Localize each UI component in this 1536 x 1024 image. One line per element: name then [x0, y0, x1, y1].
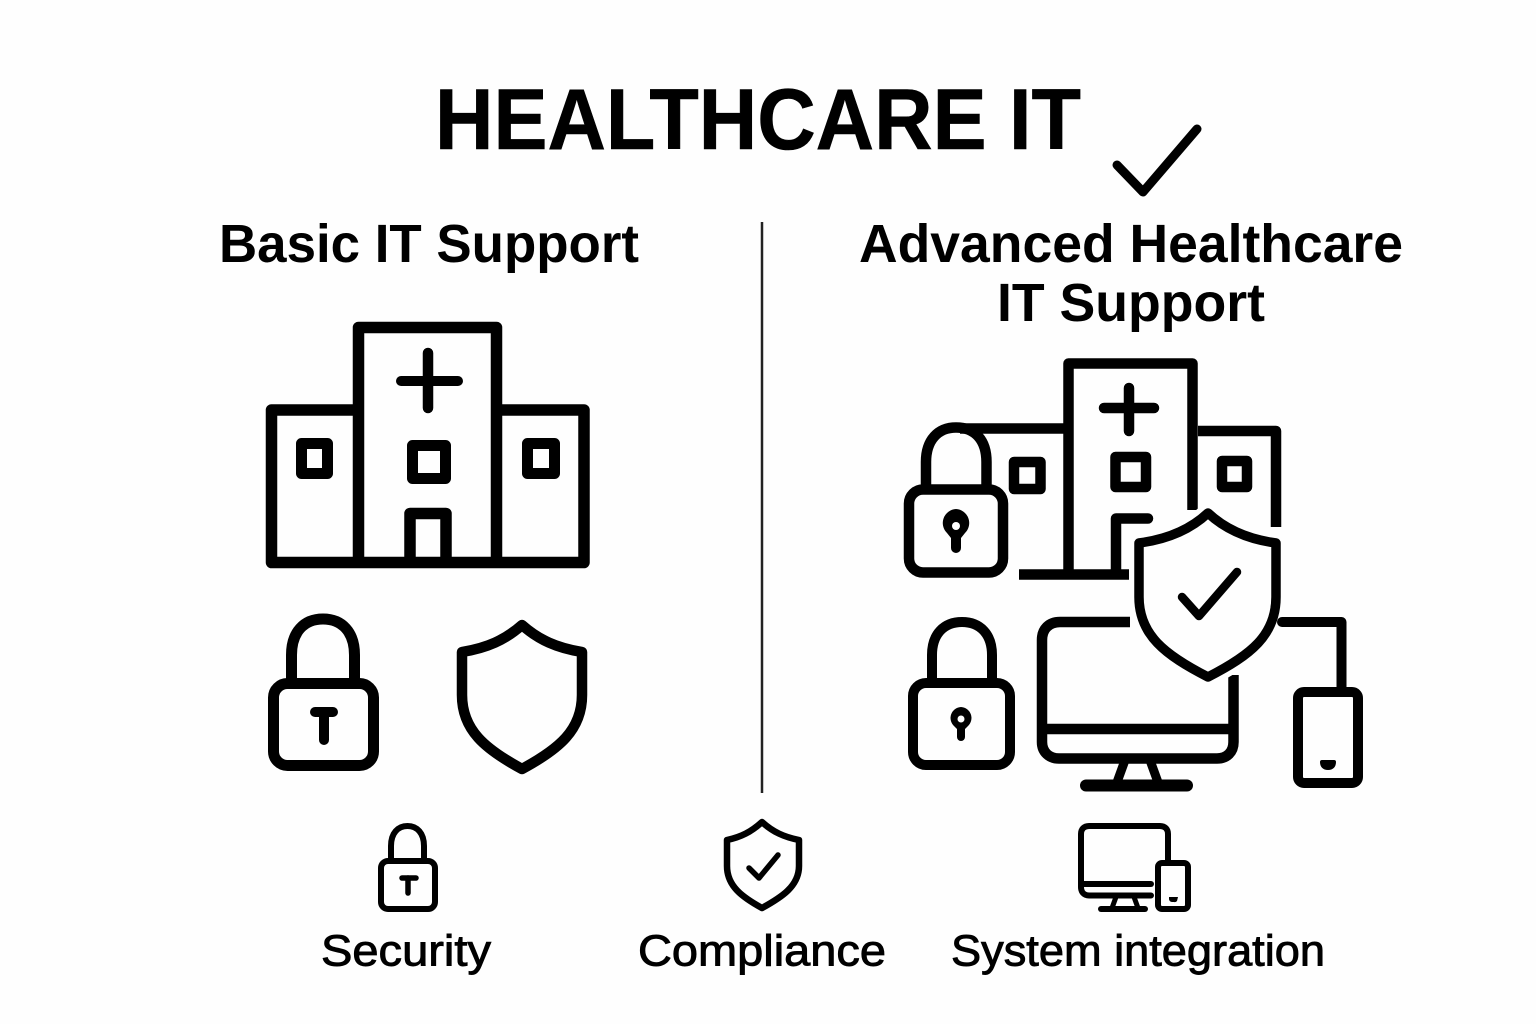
icon: small shield with check	[727, 822, 799, 908]
icon: basic hospital	[272, 328, 584, 562]
icon: basic shield	[462, 625, 582, 769]
heading: advanced healthcare IT support: Advanced Healthcare	[859, 214, 1403, 274]
legend: system integration: System integration	[951, 926, 1325, 976]
heading: basic IT support: Basic IT Support	[219, 214, 639, 274]
legend: compliance: Compliance	[638, 926, 886, 976]
icon: advanced shield with check	[1139, 513, 1276, 677]
legend: compliance	[638, 822, 886, 976]
icon: connector and phone	[1282, 622, 1358, 783]
heading: advanced healthcare IT support: IT Support	[997, 273, 1265, 333]
icon: basic padlock	[274, 619, 374, 766]
title: HEALTHCARE IT	[435, 72, 1081, 168]
icon: monitor	[1042, 622, 1234, 786]
legend: security	[321, 826, 491, 976]
legend: system integration	[951, 826, 1325, 976]
legend: security: Security	[321, 926, 491, 976]
icon: small padlock	[381, 826, 435, 909]
icon: advanced upper padlock	[909, 428, 1003, 572]
heading: advanced healthcare IT support	[859, 214, 1403, 333]
icon: title check mark	[1117, 129, 1197, 192]
icon: advanced hospital	[960, 364, 1276, 574]
icon: small monitor and phone	[1081, 826, 1188, 909]
icon: advanced lower padlock	[913, 622, 1010, 765]
